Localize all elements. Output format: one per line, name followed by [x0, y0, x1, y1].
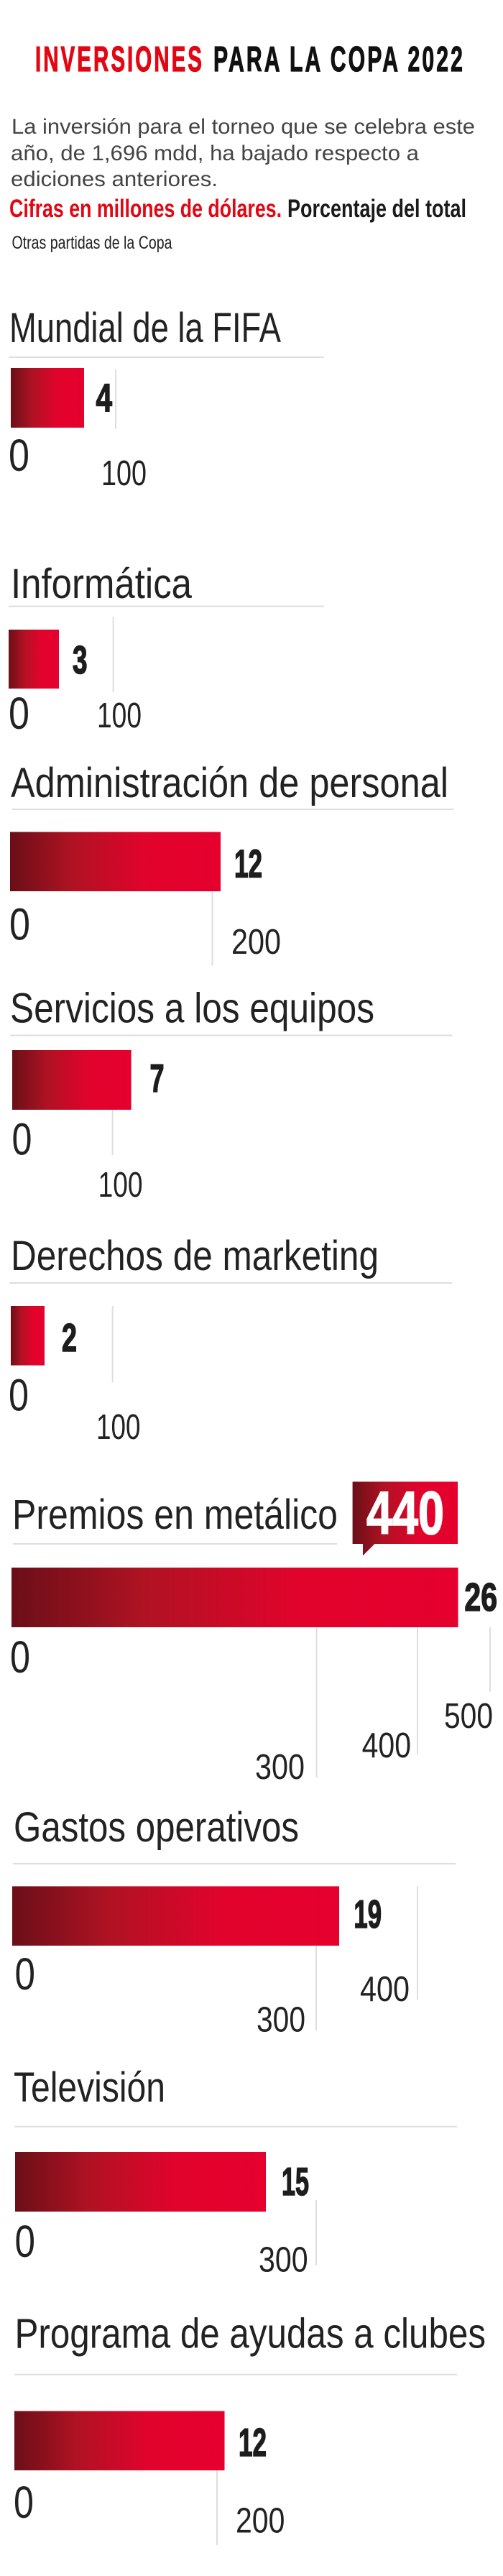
bar: [15, 2152, 266, 2212]
heading: Administración de personal: [11, 760, 448, 806]
panel: Servicios a los equipos: [10, 985, 453, 1205]
value: 3: [73, 638, 88, 682]
axis label: 100: [101, 454, 147, 493]
panel: Televisión: [14, 2064, 457, 2280]
axis zero: 0: [9, 900, 30, 950]
axis zero: 0: [14, 1949, 35, 2000]
bar: [12, 1050, 131, 1110]
axis label: 300: 300: [255, 1748, 305, 1787]
legend: units: Cifras en millones de dólares.: [9, 195, 282, 223]
axis label: 200: [236, 2501, 285, 2540]
callout: 440: 440: [366, 1479, 444, 1547]
panel: Informática: [9, 561, 324, 739]
title: [35, 40, 465, 79]
heading: Mundial de la FIFA: [9, 305, 281, 351]
axis zero: 0: [9, 431, 29, 481]
panel: Programa de ayudas a clubes: [14, 2310, 486, 2545]
panel: Mundial de la FIFA: [9, 305, 324, 493]
panel: Gastos operativos: [12, 1804, 456, 2040]
value: 2: [62, 1315, 77, 1360]
axis label: 500: 500: [444, 1697, 493, 1736]
value: 4: [96, 375, 112, 420]
intro text: año, de 1,696 mdd, ha bajado respecto a: [11, 142, 419, 165]
axis zero: 0: [9, 689, 29, 739]
panel: Premios en metálico: [10, 1479, 497, 1787]
value: 7: [149, 1056, 164, 1100]
title: INVERSIONES: [35, 40, 204, 79]
bar: [9, 630, 59, 689]
bar: [11, 1306, 45, 1366]
axis zero: 0: [9, 1370, 29, 1420]
axis label: 300: [259, 2241, 308, 2280]
value: 15: [282, 2159, 309, 2204]
axis zero: 0: [10, 1632, 30, 1683]
panel: Administración de personal: [9, 760, 454, 966]
intro text: La inversión para el torneo que se celebra este: [11, 115, 475, 139]
bar: [11, 368, 84, 428]
bar: [11, 1568, 458, 1627]
axis label: 400: 400: [362, 1726, 411, 1765]
bar: [14, 2411, 224, 2470]
axis zero: 0: [14, 2217, 35, 2267]
heading: Gastos operativos: [14, 1804, 299, 1851]
axis label: 300: 300: [257, 2001, 305, 2040]
intro text: [11, 115, 475, 191]
panel: Derechos de marketing: [9, 1233, 452, 1447]
subtitle: Otras partidas de la Copa: [11, 233, 172, 253]
heading: Premios en metálico: [12, 1491, 338, 1538]
axis zero: 0: [11, 1114, 32, 1164]
axis zero: 0: [14, 2478, 34, 2528]
value: 19: [354, 1892, 382, 1936]
heading: Derechos de marketing: [11, 1233, 379, 1279]
bar: [10, 832, 221, 891]
bar: [12, 1886, 339, 1946]
heading: Servicios a los equipos: [10, 985, 374, 1032]
axis label: 400: 400: [360, 1970, 410, 2009]
heading: Televisión: [14, 2064, 165, 2111]
intro text: ediciones anteriores.: [11, 167, 218, 191]
axis label: 100: [97, 696, 142, 735]
heading: Informática: [11, 561, 193, 607]
axis label: 100: [96, 1408, 141, 1447]
value: 12: [239, 2420, 267, 2465]
axis label: 100: [98, 1166, 143, 1205]
axis label: 200: [231, 923, 281, 962]
value: 12: [234, 841, 262, 886]
